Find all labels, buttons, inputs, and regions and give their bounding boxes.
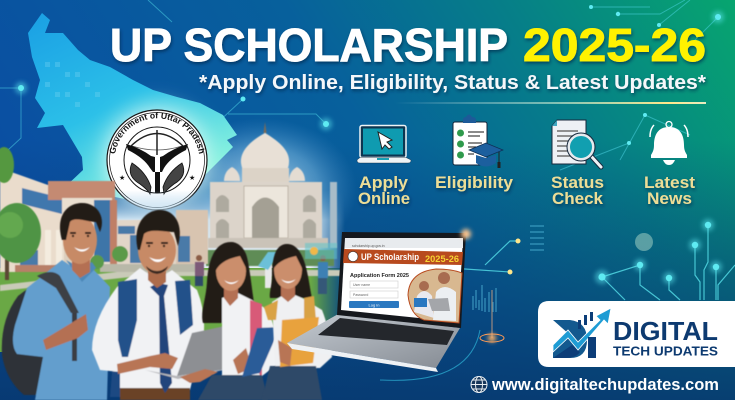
- map of Uttar Pradesh: [28, 13, 237, 200]
- student 1 with backpack: [2, 203, 110, 400]
- icon labels: Eligibility: [435, 173, 514, 192]
- big laptop with application form: 2025-26: [425, 254, 459, 265]
- blue book: [242, 327, 280, 377]
- big laptop with application form: Log in: [369, 302, 379, 308]
- white shirt: [92, 268, 204, 390]
- seal: Government of Uttar Pradesh: ★: [119, 174, 125, 182]
- grey laptop: [177, 322, 244, 376]
- arm: [43, 314, 88, 350]
- big laptop with application form: User name: [353, 283, 370, 287]
- hair: [270, 244, 312, 298]
- icon labels: News: [647, 189, 692, 208]
- website url: www.digitaltechupdates.com: [491, 375, 719, 394]
- form: Application Form 2025: [350, 273, 409, 279]
- form photo: [408, 269, 462, 323]
- laptop screen: [337, 232, 466, 328]
- backpack: [2, 282, 60, 395]
- orange folder: [280, 317, 319, 367]
- background figures: [195, 243, 337, 294]
- head: [281, 285, 295, 302]
- campus and Taj Mahal scene: [0, 122, 345, 352]
- icon: eligibility clipboard with graduation cap: [453, 114, 503, 168]
- tie: [150, 283, 172, 393]
- title: UP SCHOLARSHIP: [110, 19, 508, 71]
- Digital Tech Updates logo: TECH UPDATES: [613, 344, 718, 358]
- big laptop with application form: [287, 229, 471, 372]
- shirt: [272, 292, 332, 368]
- skirt: [198, 375, 268, 400]
- trees: [0, 147, 41, 280]
- title: 2025-26: [523, 19, 706, 71]
- hands: [117, 353, 178, 374]
- icon labels: Status: [551, 173, 604, 192]
- student 4 with folder: [262, 244, 332, 400]
- subtitle: *Apply Online, Eligibility, Status & Latest Updates*: [199, 72, 706, 94]
- student 2 with laptop: [92, 210, 244, 400]
- seal: Government of Uttar Pradesh: Government of Uttar Pradesh: [110, 112, 204, 154]
- Digital Tech Updates logo: [538, 301, 735, 367]
- icon: globe: [471, 376, 487, 392]
- title: [110, 19, 706, 71]
- big laptop with application form: scholarship.up.gov.in: [352, 244, 385, 248]
- web banner: [343, 249, 463, 265]
- white shirt: [222, 292, 279, 376]
- big laptop with application form: Password: [353, 293, 368, 297]
- big laptop with application form: UP Scholarship: [361, 252, 419, 263]
- backpack straps: [118, 279, 137, 357]
- arm: [233, 348, 252, 374]
- icon labels: Apply: [359, 173, 409, 192]
- long hair: [202, 242, 258, 323]
- sky and lawn: [0, 190, 345, 352]
- icon: laptop - apply online: [357, 126, 411, 163]
- icon labels: [358, 173, 695, 208]
- college building: [0, 168, 345, 291]
- Taj Mahal: [206, 122, 337, 266]
- Digital Tech Updates logo: DIGITAL: [613, 318, 718, 346]
- logo mark: [553, 320, 587, 358]
- divider line: [395, 102, 706, 104]
- icon: bell - latest news: [650, 122, 688, 165]
- icon: status check document with magnifier: [552, 120, 601, 167]
- blue shirt: [13, 260, 110, 400]
- head: [148, 262, 166, 288]
- seal: Government of Uttar Pradesh: [90, 90, 224, 216]
- belt: [120, 388, 190, 400]
- backpack: [110, 350, 130, 397]
- student 3 with book: [198, 242, 280, 400]
- laptop base: [287, 313, 460, 368]
- seal: Government of Uttar Pradesh: ★: [189, 174, 195, 182]
- skirt: [262, 366, 322, 400]
- head: [224, 284, 238, 306]
- bag strap: [37, 272, 79, 313]
- head: [72, 248, 90, 278]
- icon labels: Latest: [644, 173, 695, 192]
- icon labels: Check: [552, 189, 604, 208]
- glow behind Taj Mahal: [167, 118, 357, 262]
- icon labels: Online: [358, 189, 410, 208]
